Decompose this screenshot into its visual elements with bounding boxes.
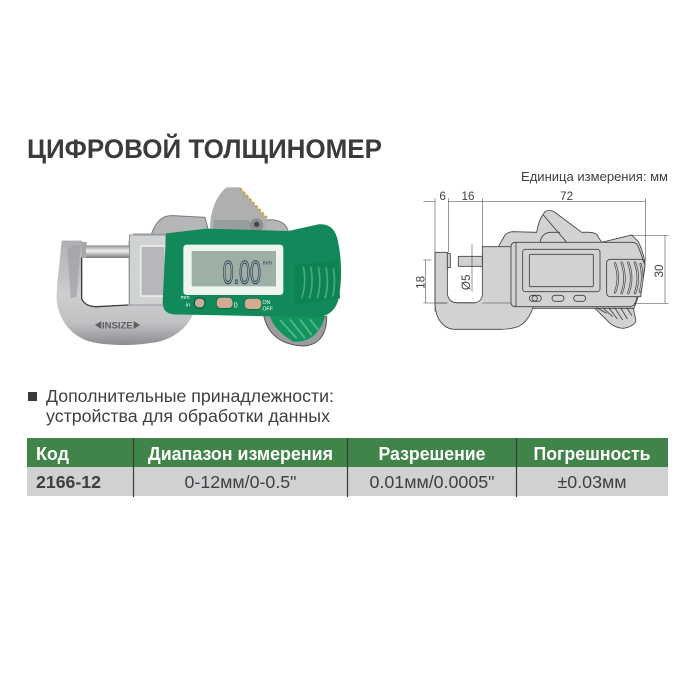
wheel bbox=[593, 307, 636, 328]
brand mark bbox=[95, 321, 140, 331]
row values: 2166-12 bbox=[36, 472, 101, 492]
back housing bbox=[152, 216, 288, 237]
buttons bbox=[181, 295, 274, 313]
display bbox=[183, 245, 283, 295]
unit note: Единица измерения: мм bbox=[521, 170, 668, 184]
accessories note: Дополнительные принадлежности: bbox=[46, 386, 334, 406]
dimension labels: 30 bbox=[653, 264, 666, 277]
C frame bbox=[57, 233, 193, 345]
buttons: ON bbox=[262, 300, 270, 306]
header labels: Разрешение bbox=[378, 444, 486, 464]
buttons: mm bbox=[181, 295, 190, 301]
screen bbox=[523, 249, 600, 292]
grip bbox=[607, 259, 645, 297]
bullet bbox=[28, 392, 37, 401]
table header bbox=[27, 438, 668, 467]
row values: 0.01мм/0.0005" bbox=[370, 472, 494, 492]
row values bbox=[36, 472, 626, 492]
accessories note: устройства для обработки данных bbox=[46, 406, 330, 426]
green body bbox=[163, 224, 341, 317]
dimension labels: 72 bbox=[560, 190, 573, 203]
dimension labels: 6 bbox=[439, 190, 446, 203]
thumb wheel bbox=[263, 313, 327, 346]
title: ЦИФРОВОЙ ТОЛЩИНОМЕР bbox=[27, 134, 382, 164]
buttons: in bbox=[186, 302, 190, 308]
header labels: Диапазон измерения bbox=[148, 444, 333, 464]
product photo: digital thickness gauge: mm bbox=[263, 261, 272, 267]
dimension labels: 16 bbox=[462, 190, 474, 203]
slider block bbox=[129, 235, 166, 305]
dimension labels bbox=[415, 190, 666, 290]
product photo: digital thickness gauge bbox=[57, 187, 341, 346]
anvil and spindle bbox=[458, 256, 482, 266]
row values: 0-12мм/0-0.5" bbox=[184, 472, 296, 492]
accessories note bbox=[28, 386, 334, 426]
dimension labels: Ø5 bbox=[460, 275, 473, 290]
table row bbox=[27, 467, 668, 496]
buttons bbox=[529, 295, 541, 301]
wheel ticks bbox=[597, 308, 632, 320]
dimension labels: 18 bbox=[415, 276, 428, 289]
serrated lever bbox=[210, 187, 267, 232]
reading: 0.00 bbox=[223, 254, 261, 290]
row values: ±0.03мм bbox=[558, 472, 626, 492]
dimension drawing bbox=[415, 190, 669, 329]
spindle rod bbox=[82, 242, 87, 258]
specification table bbox=[27, 438, 668, 497]
buttons: 0 bbox=[234, 300, 238, 309]
grip bbox=[295, 260, 340, 305]
C frame bbox=[435, 247, 533, 329]
header labels bbox=[36, 444, 650, 464]
body bbox=[511, 242, 645, 307]
header labels: Погрешность bbox=[534, 444, 650, 464]
dimension lines bbox=[423, 198, 669, 312]
back housing and lever bbox=[498, 210, 645, 308]
brand mark: INSIZE bbox=[102, 321, 133, 331]
buttons: OFF bbox=[262, 307, 274, 313]
header labels: Код bbox=[36, 444, 70, 464]
